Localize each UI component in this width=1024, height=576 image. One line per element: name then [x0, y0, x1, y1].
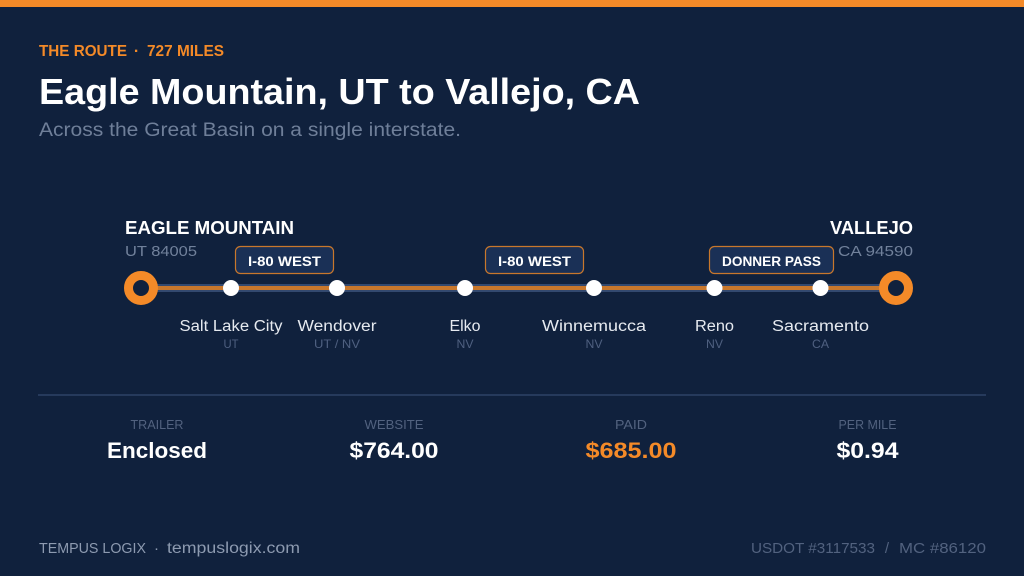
stop: Sacramento [772, 280, 869, 351]
destination label: CA 94590 [838, 244, 913, 260]
footer: company and website: TEMPUS LOGIX [39, 540, 146, 557]
stop: Wendover: Wendover [298, 318, 376, 335]
footer: company and website: tempuslogix.com [167, 540, 300, 557]
subtitle: Across the Great Basin on a single interstate. [39, 120, 461, 141]
footer: company and website: · [154, 540, 159, 557]
destination label: VALLEJO [830, 218, 913, 238]
stat: trailer [107, 417, 207, 463]
badge: I-80 West, first segment [236, 246, 334, 274]
footer: carrier numbers [751, 540, 986, 557]
badge: Donner Pass: DONNER PASS [722, 254, 821, 269]
stop: Wendover: UT / NV [314, 337, 360, 351]
stop: Salt Lake City: Salt Lake City [180, 318, 283, 335]
route line [141, 284, 897, 292]
stat: paid price: PAID [615, 417, 647, 432]
stat: paid price [586, 417, 676, 463]
origin marker [128, 276, 154, 300]
stat: website price [350, 417, 438, 463]
stat: website price: WEBSITE [364, 417, 424, 432]
stat: paid price: $685.00 [586, 438, 676, 463]
origin label [125, 218, 294, 260]
stop: Reno: Reno [695, 318, 734, 335]
title: Eagle Mountain, UT to Vallejo, CA [39, 71, 640, 112]
origin label: UT 84005 [125, 244, 197, 260]
stop: Wendover [298, 280, 376, 351]
stat: trailer: TRAILER [130, 417, 184, 432]
footer: carrier numbers: USDOT #3117533 [751, 540, 875, 557]
stop: Salt Lake City [180, 280, 283, 351]
stat: website price: $764.00 [350, 438, 438, 463]
footer: carrier numbers: MC #86120 [899, 540, 986, 557]
destination marker [884, 276, 908, 300]
badge: I-80 West, second segment [486, 246, 584, 274]
stop: Salt Lake City: UT [224, 337, 239, 351]
stop: Elko: NV [456, 337, 474, 351]
origin label: EAGLE MOUNTAIN [125, 218, 294, 238]
stop: Winnemucca: Winnemucca [542, 318, 646, 335]
stop: Winnemucca: NV [586, 337, 602, 351]
stop: Reno [695, 280, 734, 351]
stat: per mile [836, 417, 899, 463]
stop: Winnemucca [542, 280, 646, 351]
stop: Elko: Elko [450, 318, 480, 335]
badge: I-80 West, second segment: I-80 WEST [498, 254, 572, 269]
eyebrow: route distance: · [134, 43, 139, 60]
eyebrow: route distance: THE ROUTE [39, 43, 127, 60]
route diagram [125, 218, 913, 351]
stop: Reno: NV [706, 337, 723, 351]
footer: company and website [39, 540, 300, 557]
badge: I-80 West, first segment: I-80 WEST [248, 254, 322, 269]
destination label [830, 218, 913, 260]
footer: carrier numbers: / [885, 540, 890, 557]
eyebrow: route distance [39, 43, 224, 60]
stop: Elko [450, 280, 480, 351]
stop: Sacramento: CA [812, 337, 829, 351]
eyebrow: route distance: 727 MILES [147, 43, 224, 60]
stat: per mile: $0.94 [836, 438, 899, 463]
stop: Sacramento: Sacramento [772, 318, 869, 335]
stat: trailer: Enclosed [107, 438, 207, 463]
stat: per mile: PER MILE [838, 417, 897, 432]
badge: Donner Pass [710, 246, 834, 274]
